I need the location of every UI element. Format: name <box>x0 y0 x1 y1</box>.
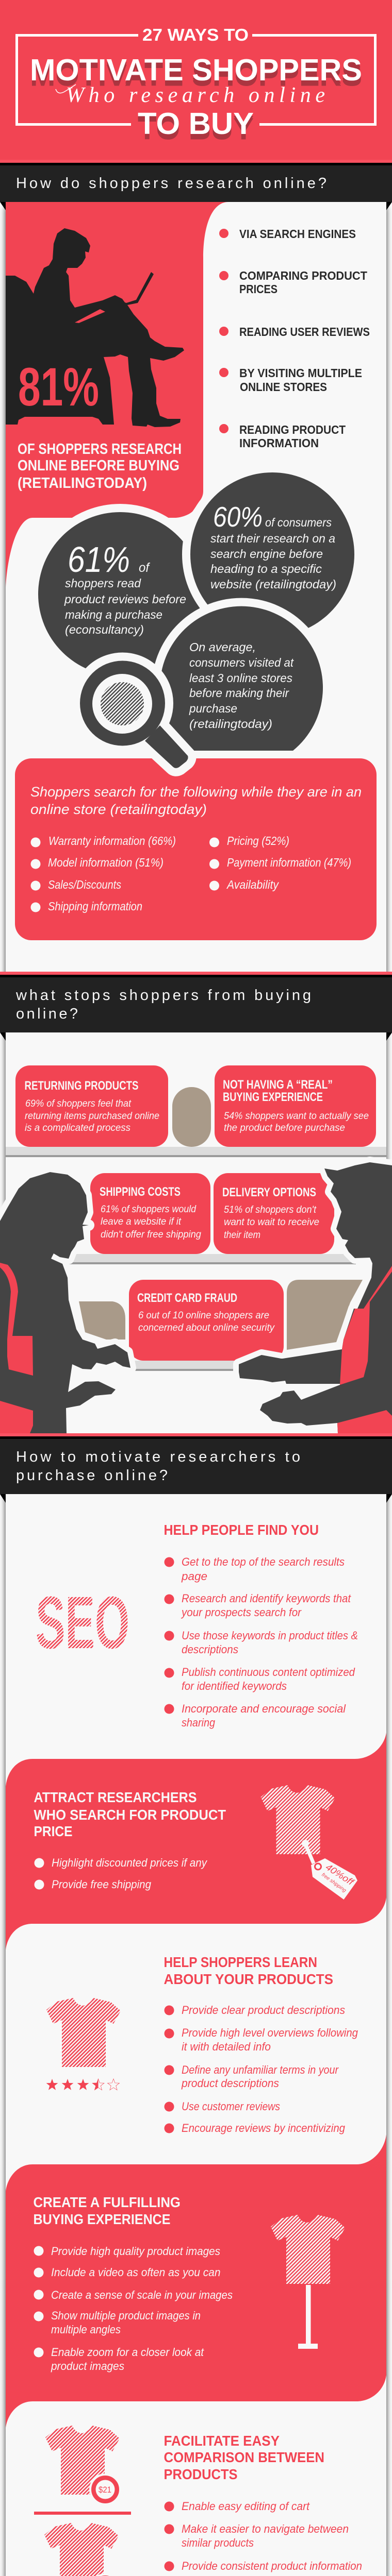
block: create a fulfilling buying experience: Provide high quality product images <box>51 2245 220 2258</box>
block: help shoppers learn: product descriptions <box>181 2077 279 2090</box>
title: 27 ways to: 27 WAYS TO <box>142 25 249 44</box>
text: on average: (retailingtoday) <box>189 717 272 731</box>
text: 61 percent: (econsultancy) <box>65 623 144 636</box>
list: how shoppers research: READING PRODUCT <box>239 423 346 436</box>
panel: shipping costs box <box>90 1173 210 1254</box>
title: motivate shoppers: MOTIVATE SHOPPERS <box>30 56 362 90</box>
block: help people find you <box>164 1522 358 1729</box>
heading: how do shoppers research online: How do shoppers research online? <box>16 175 326 192</box>
text: shipping costs: 61% of shoppers would <box>101 1204 197 1215</box>
heading: PRODUCTS <box>164 2466 237 2482</box>
figure: man silhouette <box>239 1162 392 1433</box>
icon: striped shirt with price tag: free shipping <box>320 1872 347 1894</box>
icon: magnifying glass <box>80 660 188 768</box>
block: help people find you: Use those keywords in product titles & <box>182 1629 358 1642</box>
heading <box>164 2433 324 2482</box>
text: delivery options: their item <box>224 1229 260 1241</box>
text: 60 percent: search engine before <box>210 547 323 561</box>
text: delivery options: want to wait to receive <box>224 1216 319 1228</box>
block: facilitate easy comparison: Enable easy editing of cart <box>182 2500 310 2513</box>
heading: HELP PEOPLE FIND YOU <box>164 1522 319 1538</box>
icon: striped shirt <box>46 1998 121 2067</box>
title: to buy: TO BUY <box>138 110 254 144</box>
graphic: SEO striped text: SEO <box>36 1581 129 1664</box>
block: facilitate easy comparison: similar products <box>182 2536 254 2549</box>
text: on average: least 3 online stores <box>189 671 292 685</box>
list: how shoppers research: ONLINE STORES <box>240 380 327 394</box>
heading: HELP SHOPPERS LEARN <box>164 1954 317 1970</box>
block: attract researchers <box>34 1789 226 1891</box>
panel: delivery options box <box>214 1173 334 1254</box>
block: help shoppers learn: Provide clear product descriptions <box>182 2004 345 2016</box>
text: on average: On average, <box>189 640 256 654</box>
list: what shoppers search for: Warranty information (66%) <box>48 834 176 848</box>
text: 60 percent: website (retailingtoday) <box>210 578 336 591</box>
panel: not having a real buying experience: 54% shoppers want to actually see <box>224 1110 369 1122</box>
block: create a fulfilling buying experience: Show multiple product images in <box>51 2309 201 2322</box>
block: attract researchers: Highlight discounted prices if any <box>52 1856 208 1869</box>
title: who research online: Who research online <box>66 83 325 107</box>
panel: credit card fraud box <box>129 1280 284 1361</box>
band: attract researchers red <box>6 1733 386 1950</box>
divider between shirts <box>34 2512 131 2515</box>
text: 61 percent: making a purchase <box>65 608 162 621</box>
list: how shoppers research: READING USER REVIEWS <box>239 325 370 338</box>
panel: section 3 background <box>6 1494 386 2576</box>
heading <box>34 1789 226 1839</box>
text: shoppers search intro <box>30 784 362 817</box>
list: what shoppers search for: Shipping information <box>48 900 142 913</box>
block: help people find you: Publish continuous content optimized <box>182 1666 355 1679</box>
panel: returning products: RETURNING PRODUCTS <box>25 1079 138 1093</box>
icon: striped shirt with price tag: 40%off <box>324 1862 356 1888</box>
bubble: 61 percent <box>38 512 202 676</box>
panel: returning products: 69% of shoppers feel that <box>25 1098 132 1109</box>
block: create a fulfilling buying experience: Create a sense of scale in your images <box>51 2289 233 2301</box>
list: what shoppers search for: Availability <box>226 878 279 891</box>
heading <box>33 2194 181 2227</box>
panel: returning products: returning items purchased online <box>25 1110 159 1122</box>
text: 61 percent <box>64 539 186 636</box>
heading: what stops shoppers: online? <box>16 1006 78 1022</box>
text: shipping costs: SHIPPING COSTS <box>100 1185 181 1199</box>
text: delivery options: DELIVERY OPTIONS <box>222 1185 316 1199</box>
block: create a fulfilling buying experience: Include a video as often as you can <box>51 2266 221 2279</box>
heading: ABOUT YOUR PRODUCTS <box>164 1971 333 1987</box>
block: facilitate easy comparison <box>164 2433 362 2576</box>
text: delivery options: 51% of shoppers don't <box>224 1204 317 1215</box>
icon: person on sofa with laptop <box>6 228 184 427</box>
heading: how to motivate researchers <box>16 1449 300 1484</box>
heading: what stops shoppers <box>15 987 311 1022</box>
block: attract researchers: Provide free shipping <box>52 1878 152 1891</box>
block: help shoppers learn <box>164 1954 358 2134</box>
block: facilitate easy comparison: Provide consistent product information <box>182 2560 362 2572</box>
heading: FACILITATE EASY <box>164 2433 280 2449</box>
shelf 2 <box>67 1254 356 1264</box>
text: on average: consumers visited at <box>189 656 295 669</box>
section 3 heading ribbon <box>0 1433 392 1503</box>
text: of shoppers research online: (RETAILINGTODAY) <box>18 475 147 492</box>
decoration: tan book right <box>287 1280 363 1350</box>
block: help shoppers learn: Provide high level overviews following <box>182 2026 358 2039</box>
decoration: tan book left <box>79 1301 125 1340</box>
text: 60 percent <box>210 501 336 591</box>
text: 60 percent: heading to a specific <box>210 562 322 575</box>
text: shoppers search intro: online store (retailingtoday) <box>30 802 207 817</box>
block: create a fulfilling buying experience: product images <box>51 2360 124 2372</box>
text: of shoppers research online: ONLINE BEFORE BUYING <box>18 457 179 474</box>
title: motivate shoppers: MOTIVATE SHOPPERS <box>30 59 362 93</box>
text: of shoppers research online: OF SHOPPERS RESEARCH <box>18 441 182 457</box>
title: to buy: TO BUY <box>138 112 254 146</box>
block: help shoppers learn: Use customer reviews <box>182 2100 280 2113</box>
list: what shoppers search for: Payment information (47%) <box>227 856 351 869</box>
list: what shoppers search for: Model information (51%) <box>48 856 164 869</box>
heading: how to motivate researchers: purchase online? <box>16 1467 168 1484</box>
block: create a fulfilling buying experience <box>33 2194 233 2372</box>
block: help people find you: page <box>181 1570 207 1583</box>
text: shoppers search intro: Shoppers search for the following while they are in an <box>30 784 362 800</box>
panel: not having a real buying experience: NOT HAVING A “REAL” <box>223 1078 333 1092</box>
text: 61 percent: shoppers read <box>65 577 141 590</box>
list: how shoppers research: INFORMATION <box>239 436 319 450</box>
panel: returning products: is a complicated process <box>25 1122 130 1133</box>
icon: star rating <box>46 2079 119 2090</box>
text: credit card fraud: concerned about online security <box>138 1322 275 1333</box>
shelf 1 <box>6 1147 386 1157</box>
title: motivate shoppers: MOTIVATE SHOPPERS <box>30 53 362 87</box>
text: 60 percent: of consumers <box>265 516 332 529</box>
block: help people find you: Get to the top of the search results <box>182 1555 345 1568</box>
list: what shoppers search for: Sales/Discounts <box>48 878 121 891</box>
heading: BUYING EXPERIENCE <box>33 2211 170 2227</box>
text: 61 percent: product reviews before <box>64 592 186 606</box>
text: shipping costs: didn't offer free shipping <box>101 1229 201 1240</box>
panel: red 81 percent panel <box>6 202 228 587</box>
block: help people find you: Research and identify keywords that <box>182 1592 351 1605</box>
heading: how to motivate researchers: How to motivate researchers to <box>16 1449 300 1465</box>
list: how shoppers research: BY VISITING MULTIPLE <box>239 366 362 380</box>
icon: shirt priced 17 dollars <box>44 2523 120 2576</box>
block: help shoppers learn: Define any unfamiliar terms in your <box>182 2063 339 2076</box>
text: 61 percent: of <box>139 561 151 575</box>
text: of shoppers research online <box>18 441 182 492</box>
icon: shirt priced 21 dollars: $21 <box>99 2485 111 2495</box>
figure: woman silhouette <box>0 1172 130 1433</box>
heading: CREATE A FULFILLING <box>33 2194 181 2210</box>
header banner <box>0 0 392 163</box>
panel: not having a real buying experience: BUYING EXPERIENCE <box>223 1090 323 1104</box>
list: how shoppers research: PRICES <box>239 282 277 296</box>
section 1 heading ribbon <box>0 163 392 210</box>
list: what shoppers search for <box>31 834 351 913</box>
bubble: 60 percent <box>190 472 354 636</box>
block: help shoppers learn: Encourage reviews by incentivizing <box>182 2122 346 2134</box>
block: help people find you: sharing <box>182 1716 216 1729</box>
block: facilitate easy comparison: Make it easier to navigate between <box>182 2522 349 2535</box>
text: shipping costs <box>100 1185 201 1240</box>
heading <box>164 1954 333 1987</box>
section 2 heading ribbon <box>0 972 392 1041</box>
panel: shoppers search for <box>15 758 377 940</box>
icon: striped shirt with price tag <box>261 1785 357 1900</box>
band: fulfilling experience red <box>6 2134 386 2428</box>
block: create a fulfilling buying experience: Enable zoom for a closer look at <box>51 2346 204 2359</box>
list: how shoppers research <box>219 227 370 450</box>
panel: returning products <box>15 1065 168 1147</box>
list: how shoppers research: VIA SEARCH ENGINES <box>239 227 356 241</box>
text: credit card fraud: 6 out of 10 online shoppers are <box>138 1310 269 1321</box>
text: credit card fraud: CREDIT CARD FRAUD <box>137 1291 237 1305</box>
text: on average <box>189 640 295 731</box>
panel: section 1 background <box>6 202 386 972</box>
text: credit card fraud <box>137 1291 275 1333</box>
heading: WHO SEARCH FOR PRODUCT <box>34 1807 226 1823</box>
list: what shoppers search for: Pricing (52%) <box>227 834 289 848</box>
block: create a fulfilling buying experience: multiple angles <box>51 2323 121 2336</box>
icon: shirt on mannequin stand <box>271 2215 345 2349</box>
shelf 3 <box>129 1361 248 1371</box>
bubble: three online stores <box>160 606 323 751</box>
heading: ATTRACT RESEARCHERS <box>34 1789 197 1805</box>
icon: shirt priced 21 dollars <box>45 2426 120 2504</box>
text: on average: before making their <box>189 686 289 700</box>
heading: what stops shoppers: what stops shoppers from buying <box>15 987 311 1004</box>
title frame <box>17 35 375 125</box>
text: 60 percent: 60% <box>213 501 263 533</box>
block: help people find you: for identified keywords <box>182 1680 287 1692</box>
list: how shoppers research: COMPARING PRODUCT <box>239 269 368 282</box>
block: help people find you: your prospects search for <box>181 1606 302 1619</box>
decoration: tan product box <box>172 1087 211 1147</box>
heading: COMPARISON BETWEEN <box>164 2449 324 2465</box>
text: 60 percent: start their research on a <box>210 532 335 545</box>
heading: PRICE <box>34 1823 72 1839</box>
panel: not having a real buying experience <box>215 1065 376 1147</box>
title: to buy: TO BUY <box>138 107 254 141</box>
block: help shoppers learn: it with detailed info <box>182 2040 271 2053</box>
text: on average: purchase <box>189 702 237 715</box>
panel: not having a real buying experience: the product before purchase <box>224 1122 345 1133</box>
block: help people find you: Incorporate and encourage social <box>182 1702 346 1715</box>
block: help people find you: descriptions <box>182 1643 238 1656</box>
text: 61 percent: 61% <box>68 539 130 580</box>
stat: 81 percent: 81% <box>18 357 99 417</box>
text: delivery options <box>222 1185 319 1241</box>
text: shipping costs: leave a website if it <box>101 1216 182 1227</box>
panel: section 2 background <box>6 1032 386 1433</box>
